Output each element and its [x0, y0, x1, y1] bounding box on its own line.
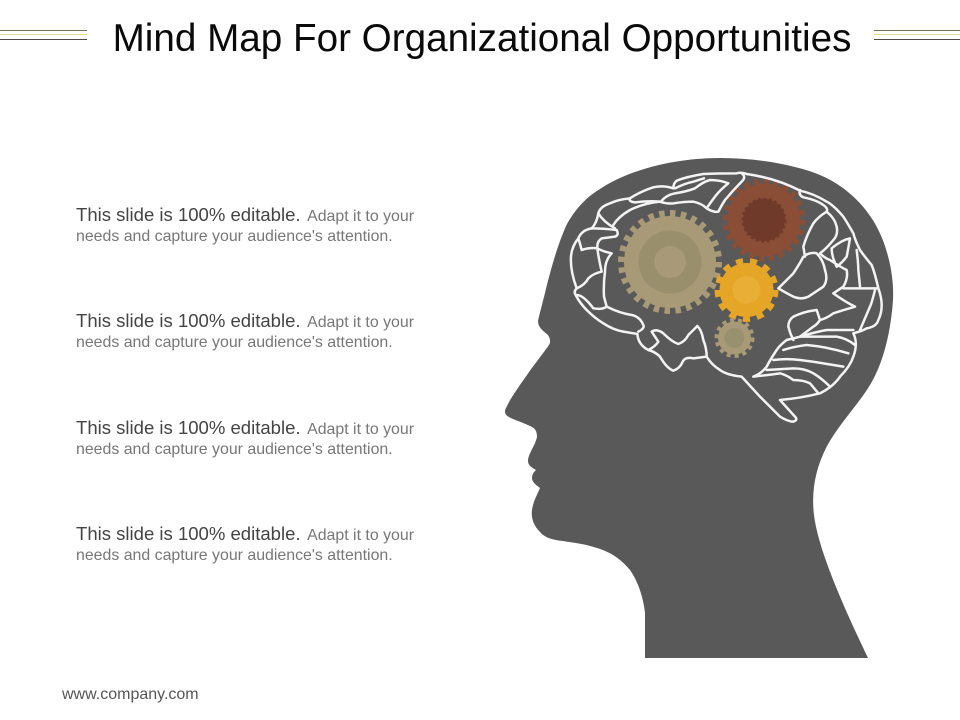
text block 2: needs and capture your audience's attention. [76, 334, 393, 350]
text block 3 [76, 416, 414, 458]
text block 2: This slide is 100% editable. Adapt it to your [76, 310, 414, 330]
text block 3: This slide is 100% editable. Adapt it to your [76, 416, 414, 438]
gear: large tan [623, 215, 717, 309]
right title rule [874, 30, 960, 40]
text block 1 [76, 204, 414, 244]
title: Mind Map For Organizational Opportunities [113, 17, 851, 60]
footer url: www.company.com [62, 686, 199, 703]
temporal folds [648, 326, 707, 357]
gear: small tan [717, 320, 752, 356]
gear: red-brown [726, 182, 802, 258]
parietal folds [778, 190, 877, 340]
gear: yellow [718, 262, 774, 318]
text block 1: needs and capture your audience's attention. [76, 228, 393, 244]
text block 4: This slide is 100% editable. Adapt it to your [76, 522, 414, 544]
text block 4 [76, 522, 414, 564]
left title rule [0, 30, 87, 40]
frontal folds [577, 173, 744, 332]
head silhouette [505, 158, 893, 658]
text block 3: needs and capture your audience's attention. [76, 440, 393, 458]
brain outer contour [571, 173, 882, 422]
brain outline [571, 173, 882, 422]
text block 2 [76, 310, 414, 350]
text block 4: needs and capture your audience's attention. [76, 546, 393, 564]
cerebellum folds [753, 337, 855, 393]
text block 1: This slide is 100% editable. Adapt it to your [76, 204, 414, 224]
